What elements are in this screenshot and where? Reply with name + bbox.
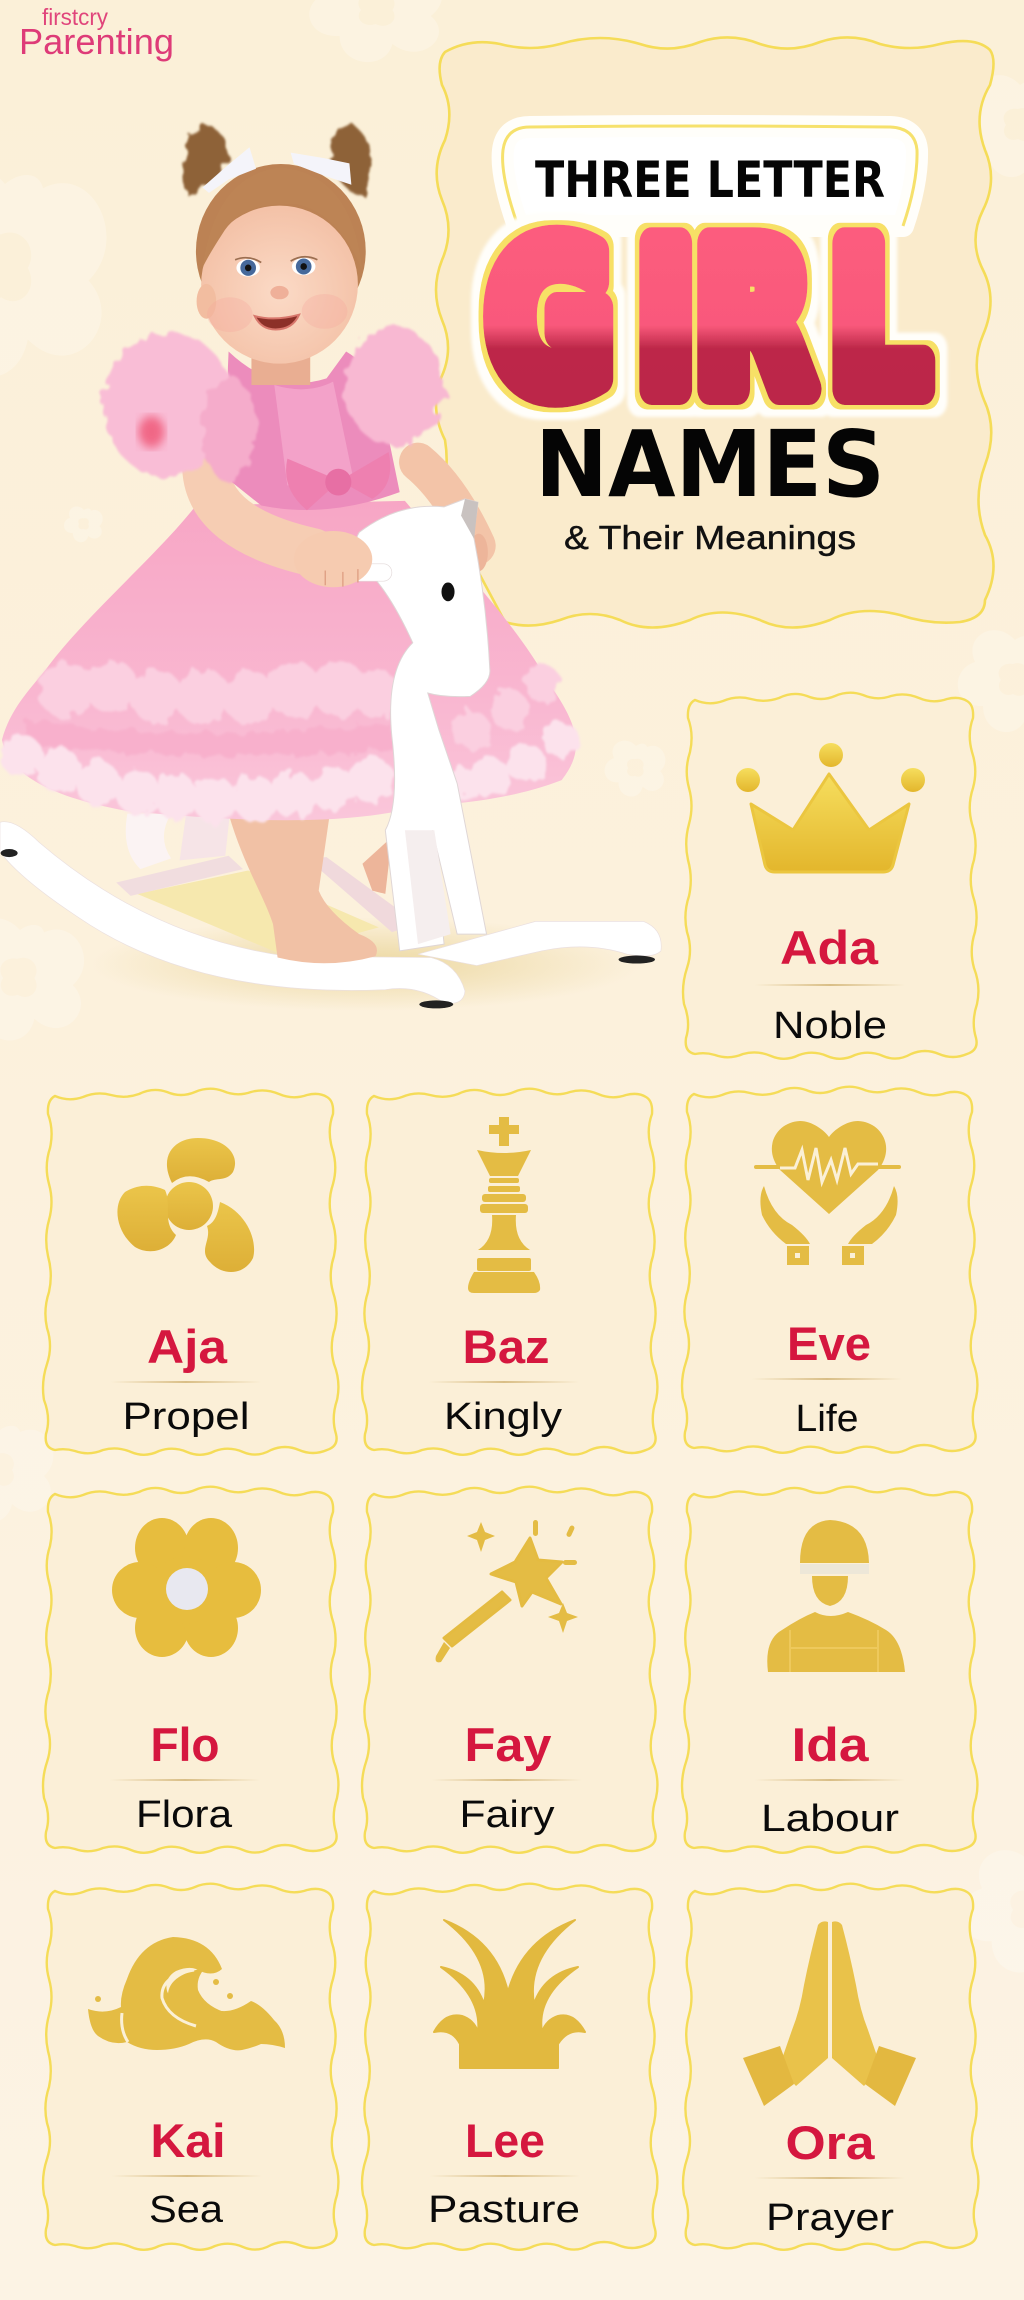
meaning: Propel bbox=[122, 1396, 250, 1438]
skirt bbox=[2, 501, 576, 820]
meaning: Sea bbox=[149, 2189, 224, 2231]
title word: girl: GIRL bbox=[488, 203, 927, 436]
icon: crown bbox=[736, 743, 925, 872]
cheeks bbox=[207, 294, 347, 332]
divider bbox=[430, 2175, 580, 2177]
icon: flower bbox=[112, 1518, 261, 1657]
name: Aja bbox=[147, 1320, 228, 1373]
card: Ida bbox=[682, 1487, 977, 1853]
red sleeve lining bbox=[138, 416, 165, 448]
name: Lee bbox=[465, 2114, 545, 2167]
card: Fay bbox=[362, 1487, 657, 1853]
icon: wave bbox=[88, 1937, 285, 2050]
divider bbox=[755, 1779, 905, 1781]
meaning: Life bbox=[796, 1398, 858, 1440]
title line: three letter: THREE LETTER bbox=[535, 151, 885, 209]
divider bbox=[112, 2175, 262, 2177]
near hand bbox=[294, 531, 372, 587]
card: Ora bbox=[683, 1884, 978, 2250]
icon: propeller bbox=[117, 1138, 254, 1272]
meaning: Fairy bbox=[460, 1794, 554, 1836]
neck bbox=[251, 341, 310, 385]
horse body and head bbox=[307, 499, 490, 951]
far arm bbox=[418, 462, 477, 546]
right sleeve bbox=[345, 328, 444, 446]
name: Fay bbox=[464, 1718, 552, 1771]
left sleeve bbox=[103, 333, 255, 482]
floor shadow bbox=[91, 917, 640, 1011]
name: Ida bbox=[792, 1718, 869, 1771]
eyes bbox=[235, 257, 317, 277]
card: Eve bbox=[682, 1087, 977, 1453]
skirt ruffles bbox=[0, 660, 579, 824]
icon: heart in hands bbox=[754, 1121, 901, 1265]
logo: firstcry bbox=[42, 4, 108, 30]
face bbox=[201, 206, 358, 364]
bow bbox=[286, 452, 390, 510]
near arm bbox=[206, 469, 313, 552]
name: Ada bbox=[780, 921, 879, 974]
hair back bbox=[196, 164, 366, 338]
fringe bbox=[202, 167, 362, 271]
name: Kai bbox=[150, 2114, 226, 2167]
icon: worker bbox=[767, 1520, 905, 1672]
pigtails bbox=[183, 124, 372, 198]
rocker back frame bbox=[116, 814, 418, 954]
icon: magic wand bbox=[436, 1520, 578, 1662]
rockers bbox=[0, 822, 661, 1008]
mouth bbox=[255, 315, 299, 329]
meaning: Pasture bbox=[428, 2189, 580, 2231]
meaning: Noble bbox=[773, 1005, 887, 1047]
divider bbox=[432, 1779, 582, 1781]
ears bbox=[197, 284, 216, 319]
name: Eve bbox=[787, 1317, 871, 1370]
icon: praying hands bbox=[743, 1921, 916, 2106]
front leg bbox=[229, 814, 377, 963]
card: Lee bbox=[362, 1884, 657, 2250]
divider bbox=[429, 1381, 579, 1383]
card: Ada bbox=[683, 693, 978, 1059]
meaning: Flora bbox=[136, 1794, 233, 1836]
name: Flo bbox=[150, 1718, 220, 1771]
nose bbox=[270, 286, 289, 299]
name: Ora bbox=[786, 2116, 875, 2169]
meaning: Kingly bbox=[444, 1396, 562, 1438]
divider bbox=[110, 1779, 260, 1781]
card: Kai bbox=[43, 1884, 338, 2250]
divider bbox=[111, 1381, 261, 1383]
bodice bbox=[227, 352, 400, 510]
title badge: white banner bbox=[503, 126, 917, 226]
divider bbox=[755, 984, 905, 986]
divider bbox=[755, 2177, 905, 2179]
far leg bbox=[362, 837, 392, 894]
illustration: baby on rocking horse bbox=[0, 124, 661, 1011]
name: Baz bbox=[462, 1320, 550, 1373]
title line: names: NAMES bbox=[535, 411, 885, 518]
card: Aja bbox=[43, 1089, 338, 1455]
meaning: Prayer bbox=[766, 2197, 894, 2239]
icon: grass bbox=[434, 1920, 585, 2068]
logo: Parenting bbox=[19, 21, 174, 62]
divider bbox=[752, 1378, 902, 1380]
panel: title bbox=[436, 37, 994, 628]
meaning: Labour bbox=[761, 1798, 899, 1840]
sequin front bbox=[274, 382, 353, 485]
card: Baz bbox=[362, 1089, 657, 1455]
icon: chess king bbox=[468, 1117, 540, 1293]
bows bbox=[202, 147, 351, 193]
subtitle: & Their Meanings bbox=[564, 519, 856, 556]
card: Flo bbox=[43, 1487, 338, 1853]
